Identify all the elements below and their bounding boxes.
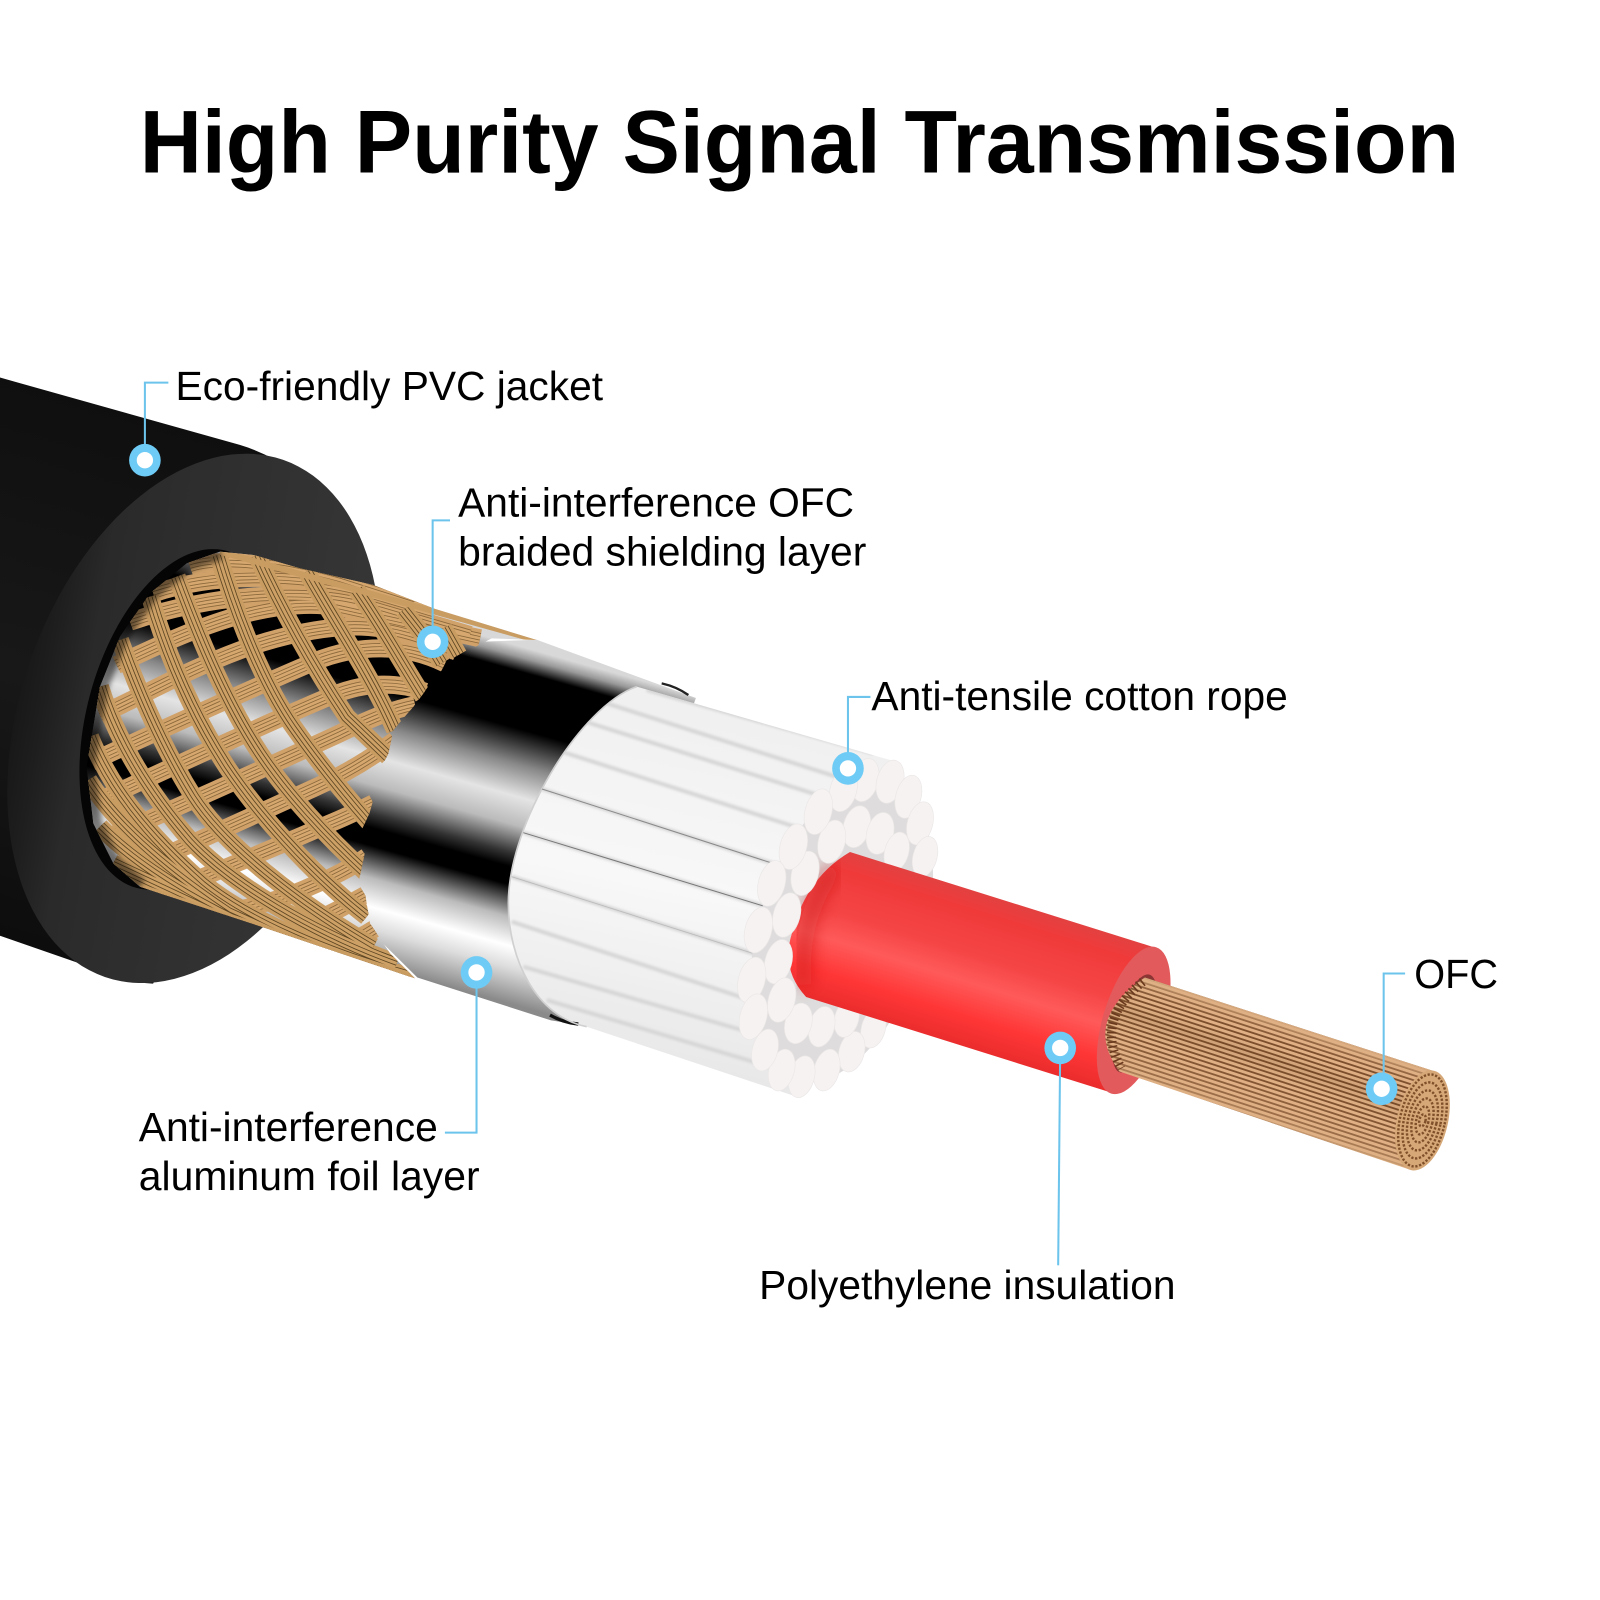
callout: cotton rope: Anti-tensile cotton rope [871, 673, 1288, 719]
cable: OFC copper conductor [1105, 978, 1459, 1176]
callout: braided shielding layer: Anti-interference OFC [458, 479, 854, 525]
callout: OFC [1366, 951, 1498, 1105]
callout: OFC: OFC [1414, 951, 1498, 997]
cable: aluminum foil layer [306, 640, 696, 1027]
callout: polyethylene insulation [759, 1032, 1176, 1308]
callout: PVC jacket: Eco-friendly PVC jacket [176, 363, 604, 409]
callout: cotton rope [832, 673, 1288, 785]
callout: aluminum foil layer [139, 956, 492, 1199]
title: High Purity Signal Transmission [140, 92, 1459, 191]
callout: polyethylene insulation: Polyethylene insulation [759, 1262, 1176, 1308]
callout: aluminum foil layer: Anti-interference [139, 1104, 438, 1150]
callout: aluminum foil layer: aluminum foil layer [139, 1153, 480, 1199]
cable: PVC jacket [0, 378, 447, 1033]
callout: braided shielding layer: braided shielding layer [458, 528, 866, 574]
cable: braided shielding layer [80, 540, 547, 990]
callout: braided shielding layer [417, 479, 866, 658]
cable: near strand ends [733, 765, 862, 1043]
cable: cotton rope strands [508, 683, 967, 1104]
callout: PVC jacket [129, 363, 604, 477]
cable: red polyethylene insulation [788, 852, 1185, 1103]
